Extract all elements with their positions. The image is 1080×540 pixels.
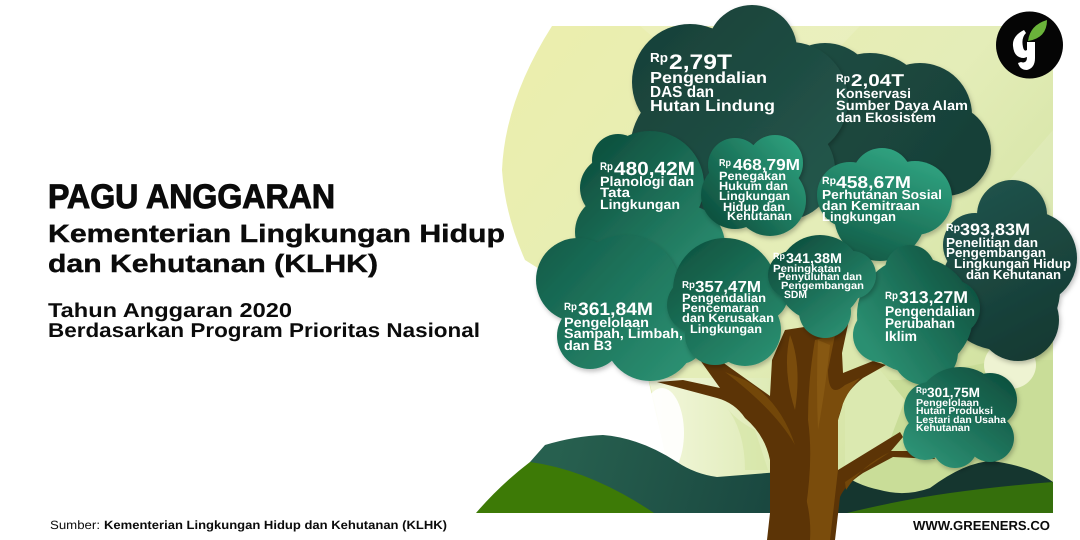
label: Rp341,38M: Peningkatan: [773, 263, 841, 275]
label: Rp480,42M: Rp: [600, 161, 613, 173]
panel: Penegakan Hukum: [701, 135, 806, 236]
label: Rp361,84M: Pengelolaan: [564, 315, 649, 330]
label: Rp313,27M: Iklim: [885, 328, 917, 344]
label: Rp357,47M: dan Kerusakan: [682, 311, 774, 325]
label: Rp2,04T: Sumber Daya Alam: [836, 98, 968, 113]
label: Rp480,42M: [600, 159, 695, 212]
label: Rp2,04T: dan Ekosistem: [836, 110, 936, 125]
label: Rp458,67M: [822, 173, 942, 224]
label: Rp301,75M: [916, 385, 1006, 434]
label: Rp341,38M: SDM: [784, 289, 807, 301]
source line: Kementerian Lingkungan Hidup dan Kehutanan (KLHK): [104, 518, 447, 532]
label: Rp2,79T: Pengendalian: [650, 70, 767, 87]
label: Rp341,38M: 341,38M: [786, 250, 842, 266]
label: Rp301,75M: Lestari dan Usaha: [916, 415, 1006, 426]
label: Rp361,84M: Rp: [564, 301, 577, 313]
label: Rp2,79T: 2,79T: [669, 51, 732, 74]
label: Rp458,67M: 458,67M: [836, 173, 911, 192]
label: Rp393,83M: Lingkungan Hidup: [954, 256, 1071, 271]
panel: Hutan Produksi: [903, 367, 1017, 468]
value labels on the tree: [564, 50, 1071, 434]
panel: Perubahan Iklim: [853, 245, 980, 385]
label: Rp313,27M: [885, 288, 975, 344]
label: Rp361,84M: 361,84M: [578, 299, 653, 319]
label: Rp341,38M: Penyuluhan dan: [778, 271, 862, 283]
label: Rp313,27M: Rp: [885, 290, 898, 302]
label: Rp2,04T: 2,04T: [851, 71, 905, 90]
panel: Planologi: [575, 131, 725, 285]
label: Rp2,79T: Rp: [650, 50, 668, 65]
subheading: tahun anggaran: Tahun Anggaran 2020: [48, 300, 292, 322]
label: Rp2,04T: Rp: [836, 73, 850, 85]
label: Rp468,79M: Kehutanan: [727, 209, 792, 223]
label: Rp361,84M: Sampah, Limbah,: [564, 326, 683, 341]
tree trunk and branches: [657, 320, 935, 540]
hills: [476, 435, 1053, 513]
logo: Greeners: [996, 12, 1063, 78]
heading: KLHK: dan Kehutanan (KLHK): [48, 250, 378, 278]
title block: [48, 178, 505, 342]
label: Rp393,83M: Penelitian dan: [946, 235, 1038, 250]
label: Rp341,38M: Pengembangan: [781, 280, 864, 292]
label: Rp341,38M: [773, 250, 864, 301]
label: Rp2,79T: Hutan Lindung: [650, 98, 775, 115]
panel: Penelitian dan Pengembangan: [940, 180, 1077, 361]
heading: Kementerian: Kementerian Lingkungan Hidup: [48, 220, 505, 248]
label: Rp480,42M: Tata: [600, 185, 631, 200]
label: Rp301,75M: Rp: [916, 385, 927, 395]
label: Rp458,67M: Lingkungan: [822, 209, 896, 224]
panel: Peningkatan Penyuluhan: [768, 235, 876, 338]
label: Rp458,67M: dan Kemitraan: [822, 198, 920, 213]
background panel: [502, 26, 1053, 513]
source line: Sumber:: [50, 518, 100, 532]
label: Rp468,79M: Rp: [719, 158, 731, 169]
label: Rp458,67M: Rp: [822, 175, 836, 187]
label: Rp361,84M: [564, 299, 683, 353]
label: Rp393,83M: [946, 221, 1071, 282]
label: Rp468,79M: [719, 157, 800, 223]
label: Rp2,04T: Konservasi: [836, 86, 911, 101]
website: WWW.GREENERS.CO: [913, 518, 1050, 533]
heading: Pagu Anggaran: PAGU ANGGARAN: [48, 178, 335, 216]
label: Rp393,83M: Pengembangan: [946, 245, 1046, 260]
label: Rp357,47M: [682, 279, 774, 336]
label: Rp2,04T: [836, 71, 968, 125]
label: Rp468,79M: 468,79M: [733, 157, 800, 174]
label: Rp393,83M: dan Kehutanan: [966, 267, 1061, 282]
label: Rp480,42M: Lingkungan: [600, 197, 680, 212]
label: Rp357,47M: Pengendalian: [682, 291, 766, 305]
label: Rp357,47M: Lingkungan: [690, 322, 762, 336]
panel: Pengelolaan Sampah: [536, 235, 704, 381]
label: Rp357,47M: Pencemaran: [682, 301, 759, 315]
label: Rp313,27M: Pengendalian: [885, 303, 975, 319]
label: Rp313,27M: 313,27M: [899, 288, 968, 307]
panel: Pengendalian Pencemaran: [667, 238, 788, 366]
label: Rp361,84M: dan B3: [564, 338, 613, 353]
label: Rp468,79M: Hidup dan: [723, 200, 785, 214]
label: Rp301,75M: Hutan Produksi: [916, 406, 993, 417]
label: Rp301,75M: Kehutanan: [916, 423, 970, 434]
label: Rp357,47M: Rp: [682, 280, 695, 291]
label: Rp2,79T: DAS dan: [650, 84, 714, 101]
label: Rp468,79M: Hukum dan: [719, 179, 788, 193]
label: Rp458,67M: Perhutanan Sosial: [822, 187, 942, 202]
label: Rp393,83M: Rp: [946, 222, 960, 234]
label: Rp2,79T: [650, 50, 775, 115]
panel: Pengendalian DAS: [630, 5, 848, 220]
label: Rp301,75M: Pengelolaan: [916, 398, 979, 409]
label: Rp468,79M: Lingkungan: [719, 189, 790, 203]
panel: Perhutanan Sosial: [817, 148, 952, 261]
label: Rp393,83M: 393,83M: [960, 221, 1030, 239]
label: Rp480,42M: Planologi dan: [600, 174, 694, 189]
subheading: program prioritas: Berdasarkan Program Prioritas Nasional: [48, 320, 480, 342]
label: Rp357,47M: 357,47M: [695, 279, 761, 296]
panel: Konservasi Sumber Daya Alam: [773, 43, 991, 230]
label: Rp313,27M: Perubahan: [885, 315, 955, 331]
label: Rp341,38M: Rp: [773, 251, 785, 261]
label: Rp480,42M: 480,42M: [614, 159, 695, 180]
label: Rp468,79M: Penegakan: [719, 169, 786, 183]
label: Rp301,75M: 301,75M: [927, 385, 980, 400]
